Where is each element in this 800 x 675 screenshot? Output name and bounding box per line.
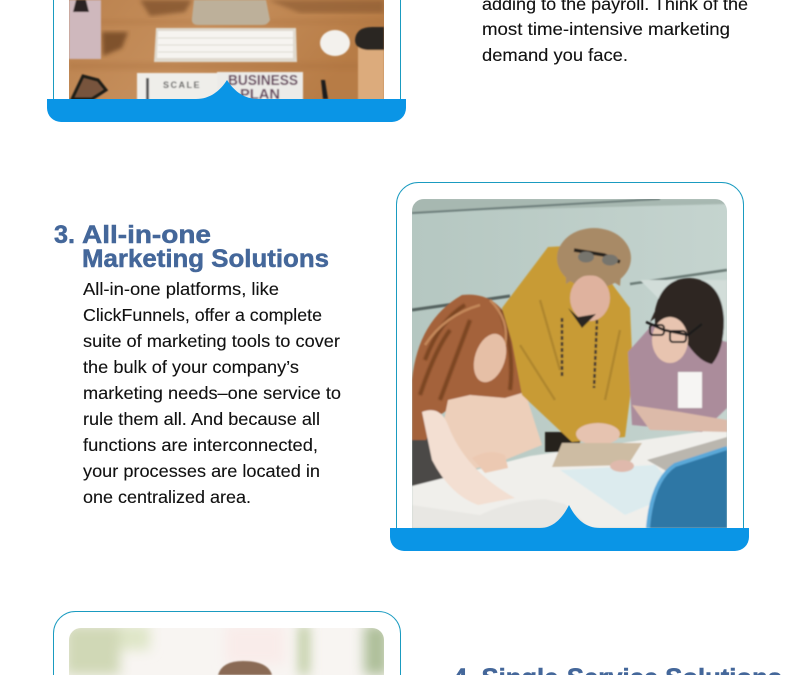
card outline [54,0,400,99]
text block: section 3 body: the bulk of your company’s [83,357,299,377]
text block: section 3 body: your processes are located in [83,461,320,481]
blue base bar with bump [47,80,406,122]
text block: section 3 body: rule them all. And because all [83,409,320,429]
table [412,428,727,528]
photo: person outdoors [65,625,388,675]
blue base bar with bump [390,505,749,551]
text block: section 3 body: All-in-one platforms, like [83,279,279,299]
laptop [647,437,727,472]
photo: desk with keyboard and business plan: SCALE [163,80,201,90]
photo: desk with keyboard and business plan: PLAN [240,86,280,103]
photo: desk with keyboard and business plan: BUSINESS [228,72,298,89]
photo: three colleagues at a table [412,199,727,528]
notebook and hands [576,423,620,445]
text block: section 3 body: marketing needs–one service to [83,383,341,403]
left woman [412,295,524,440]
card: team photo with blue base [390,182,749,551]
right woman [628,325,727,432]
photo: desk with keyboard and business plan [69,0,384,103]
man [502,245,633,442]
text block: section 3 body: one centralized area. [83,487,251,507]
heading: 3. All-in-one Marketing Solutions: Marketing Solutions [82,245,329,273]
text block: continued section 2: demand you face. [482,45,628,65]
card: portrait photo, partly visible [54,612,400,675]
white chair [412,499,590,528]
heading: 3. All-in-one Marketing Solutions: All-in-one [82,221,211,249]
card outline [396,182,744,528]
card: desk photo with blue base [47,0,406,122]
text block: section 3 body: ClickFunnels, offer a complete [83,305,322,325]
text block: continued section 2: most time-intensive marketing [482,19,730,39]
text block: continued section 2 [482,0,748,65]
heading: 3. All-in-one Marketing Solutions [54,221,329,273]
card outline [54,612,400,675]
text block: section 3 body: suite of marketing tools to cover [83,331,340,351]
text block: section 3 body [83,279,341,507]
blue chair [648,448,727,528]
heading: 3. All-in-one Marketing Solutions: 3. [54,221,75,249]
text block: section 3 body: functions are interconnected, [83,435,318,455]
